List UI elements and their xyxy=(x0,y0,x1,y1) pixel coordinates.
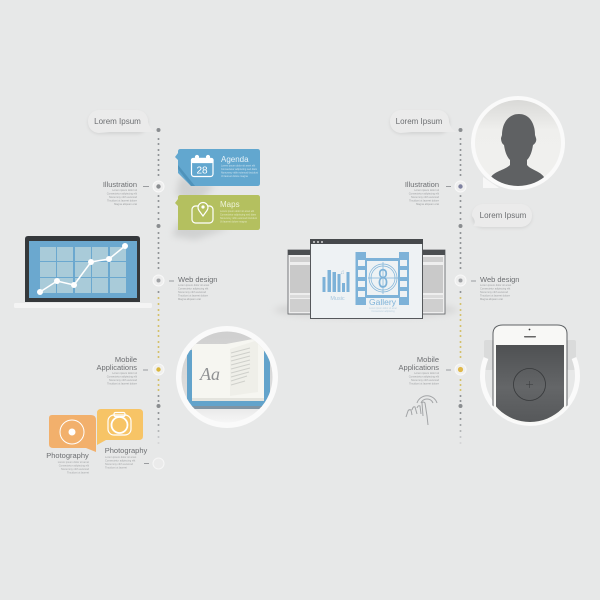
text block: Photography orange: Consectetur adipiscing elit xyxy=(59,464,89,468)
card: Maps: Maps xyxy=(220,200,240,209)
bubble: Lorem Ipsum left: Lorem Ipsum xyxy=(94,117,141,126)
text block: Mobile Applications right: Nonummy nibh euismod xyxy=(411,378,440,382)
text block: Photography orange xyxy=(46,451,90,474)
icon: calendar: 28 xyxy=(196,166,208,176)
browser windows xyxy=(274,239,458,318)
text block: Illustration right: Illustration xyxy=(405,180,439,189)
text block: Web design right: Magna aliquam erat xyxy=(480,297,503,301)
text block: Illustration right: Nonummy nibh euismod xyxy=(411,195,440,199)
text block: Photography yellow: Tincidunt ut laoreet xyxy=(105,466,127,470)
card: Agenda: Consectetur adipiscing sed diam xyxy=(221,168,257,171)
text block: Photography yellow: Lorem ipsum dolor sit amet xyxy=(105,455,137,459)
text block: Illustration right: Tincidunt ut laoreet dolore xyxy=(409,198,440,202)
text block: Web design left: Tincidunt ut laoreet dolore xyxy=(178,294,208,298)
window: left back xyxy=(288,250,318,314)
bubble: Lorem Ipsum right top xyxy=(390,110,457,134)
window: main: ♫ xyxy=(340,270,344,276)
bubble: Lorem Ipsum right lower: Lorem Ipsum xyxy=(480,211,527,220)
dial xyxy=(514,368,546,400)
text block: Illustration right: Lorem ipsum dolor sit xyxy=(414,188,439,192)
card: Maps: Ut laoreet dolore magna xyxy=(220,220,247,224)
window: main xyxy=(310,239,423,318)
text block: Mobile Applications right: Tincidunt ut laoreet dolore xyxy=(409,382,440,386)
left timeline xyxy=(143,128,174,469)
text block: Mobile Applications right: Applications xyxy=(399,363,439,372)
text block: Mobile Applications left: Applications xyxy=(97,363,137,372)
text block: Mobile Applications right: Lorem ipsum dolor sit xyxy=(414,371,439,375)
text block: Web design right xyxy=(480,275,519,301)
text block: Photography orange: Lorem ipsum dolor sit amet xyxy=(58,460,89,464)
text block: Web design left: Consectetur adipiscing elit xyxy=(178,286,209,290)
text block: Illustration right xyxy=(405,180,440,206)
text block: Web design right: Nonummy nibh euismod xyxy=(480,290,509,294)
icon: map pin xyxy=(192,202,213,223)
text block: Photography orange: Tincidunt ut laoreet xyxy=(67,470,89,474)
icon: touch hand xyxy=(406,396,437,425)
bubble: Lorem Ipsum right top: Lorem Ipsum xyxy=(396,117,443,126)
circle: book: Aa xyxy=(199,364,220,384)
text block: Web design left: Magna aliquam erat xyxy=(178,297,201,301)
card: Agenda: Ut laoreet dolore magna xyxy=(221,175,248,178)
text block: Mobile Applications left: Mobile xyxy=(115,355,137,364)
text block: Illustration left: Nonummy nibh euismod xyxy=(109,195,138,199)
avatar: person circle xyxy=(471,96,565,190)
card: Maps xyxy=(172,195,260,240)
card: Agenda: Nonummy nibh euismod tincidunt xyxy=(221,172,258,174)
window: main: Lorem ipsum dolor sit amet xyxy=(369,307,397,310)
icon: film strip: 8 xyxy=(378,263,388,293)
card: Agenda: Agenda xyxy=(221,155,249,164)
text block: Web design left: Nonummy nibh euismod xyxy=(178,290,207,294)
text block: Illustration left xyxy=(103,180,138,206)
window: main: Consectetur adipiscing xyxy=(371,310,395,313)
card: Agenda: Lorem ipsum dolor sit amet elit xyxy=(221,164,255,168)
card: Maps: Lorem ipsum dolor sit amet elit xyxy=(220,210,254,213)
text block: Mobile Applications right xyxy=(399,355,440,386)
text block: Mobile Applications left: Lorem ipsum dolor sit xyxy=(112,371,137,375)
text block: Photography orange: Photography xyxy=(46,451,89,460)
icon: film strip xyxy=(356,252,409,307)
text block: Mobile Applications left: Consectetur adipiscing elit xyxy=(107,374,137,378)
text block: Mobile Applications left: Nonummy nibh euismod xyxy=(109,378,138,382)
text block: Photography yellow: Nonummy nibh euismod xyxy=(105,462,134,466)
text block: Mobile Applications right: Consectetur adipiscing elit xyxy=(409,374,439,378)
card: Maps: Nonummy nibh euismod tincidunt xyxy=(220,217,257,220)
text block: Web design right: Tincidunt ut laoreet dolore xyxy=(480,294,510,298)
card: Maps: Consectetur adipiscing sed diam xyxy=(220,214,256,216)
text block: Web design right: Web design xyxy=(480,275,519,284)
text block: Web design right: Lorem ipsum dolor sit amet xyxy=(480,283,512,287)
icon: aperture xyxy=(60,420,84,444)
line chart xyxy=(37,243,128,295)
bubble: Lorem Ipsum right lower xyxy=(472,204,532,228)
text block: Photography yellow: Consectetur adipiscing elit xyxy=(105,458,136,462)
text block: Web design left xyxy=(178,275,217,301)
text block: Illustration right: Consectetur adipiscing elit xyxy=(409,192,439,196)
text block: Photography yellow xyxy=(105,446,148,470)
icon: camera xyxy=(108,412,131,435)
laptop xyxy=(14,236,152,308)
text block: Illustration left: Illustration xyxy=(103,180,137,189)
card: Agenda xyxy=(175,149,260,205)
text block: Web design left: Lorem ipsum dolor sit amet xyxy=(178,283,210,287)
text block: Illustration left: Magna aliquam erat xyxy=(114,202,137,206)
text block: Web design left: Web design xyxy=(178,275,217,284)
window: right back xyxy=(415,250,445,314)
window: main: Music xyxy=(330,296,345,302)
text block: Mobile Applications left xyxy=(97,355,138,386)
text block: Illustration left: Tincidunt ut laoreet dolore xyxy=(107,198,138,202)
text block: Photography yellow: Photography xyxy=(105,446,148,455)
text block: Photography orange: Nonummy nibh euismod xyxy=(61,467,90,471)
text block: Web design right: Consectetur adipiscing elit xyxy=(480,286,511,290)
circle: book xyxy=(176,326,278,428)
bubble: yellow photography xyxy=(97,409,143,445)
bar chart: music xyxy=(322,270,350,292)
text block: Illustration left: Consectetur adipiscing elit xyxy=(107,192,137,196)
text block: Mobile Applications left: Tincidunt ut laoreet dolore xyxy=(107,382,138,386)
right timeline xyxy=(446,128,476,444)
text block: Illustration left: Lorem ipsum dolor sit xyxy=(112,188,137,192)
text block: Mobile Applications right: Mobile xyxy=(417,355,439,364)
bubble: orange photography xyxy=(49,415,96,452)
icon: film strip: Gallery xyxy=(369,297,397,307)
bubble: Lorem Ipsum left xyxy=(88,110,156,134)
phone in circle xyxy=(483,325,578,430)
text block: Illustration right: Magna aliquam erat xyxy=(416,202,439,206)
